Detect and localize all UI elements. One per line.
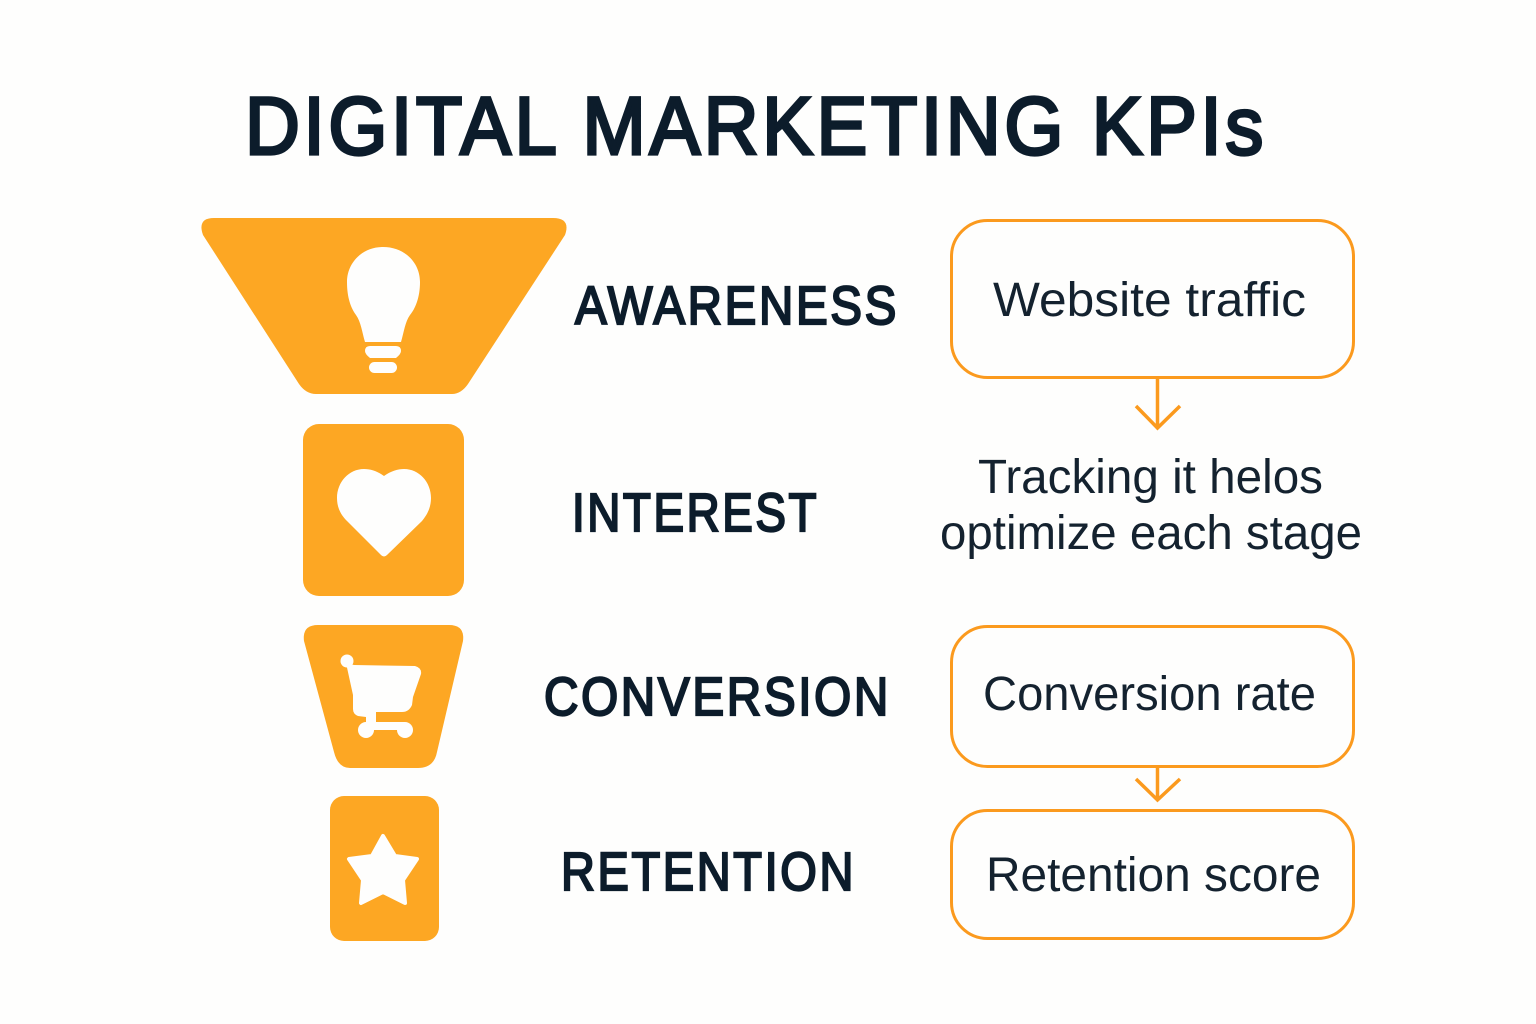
metric: retention score box: Retention score [986, 849, 1321, 902]
metric: conversion rate box: Conversion rate [983, 668, 1316, 721]
label: conversion: CONVERSION [544, 667, 891, 727]
funnel stage: conversion with cart icon [304, 625, 463, 768]
text block: tracking note: optimize each stage [940, 507, 1362, 560]
text block: tracking note [940, 451, 1362, 560]
arrow: conversion rate down to retention score [1136, 768, 1180, 800]
stage labels [544, 276, 899, 902]
arrow: website traffic down to note [1136, 378, 1180, 428]
text block: tracking note: Tracking it helos [978, 451, 1323, 504]
funnel column [201, 218, 566, 941]
label: awareness: AWARENESS [575, 276, 899, 336]
metric: retention score box [952, 810, 1354, 938]
funnel stage: interest with heart icon [303, 424, 464, 596]
funnel stage: awareness with lightbulb icon [201, 218, 566, 394]
title: DIGITAL MARKETING KPIs [245, 81, 1267, 172]
label: retention: RETENTION [561, 842, 856, 902]
metric: website traffic box: Website traffic [993, 274, 1306, 327]
metric: conversion rate box [952, 626, 1354, 766]
metric: website traffic box [952, 220, 1354, 378]
funnel stage: retention with star icon [330, 796, 439, 941]
label: interest: INTEREST [572, 483, 819, 543]
